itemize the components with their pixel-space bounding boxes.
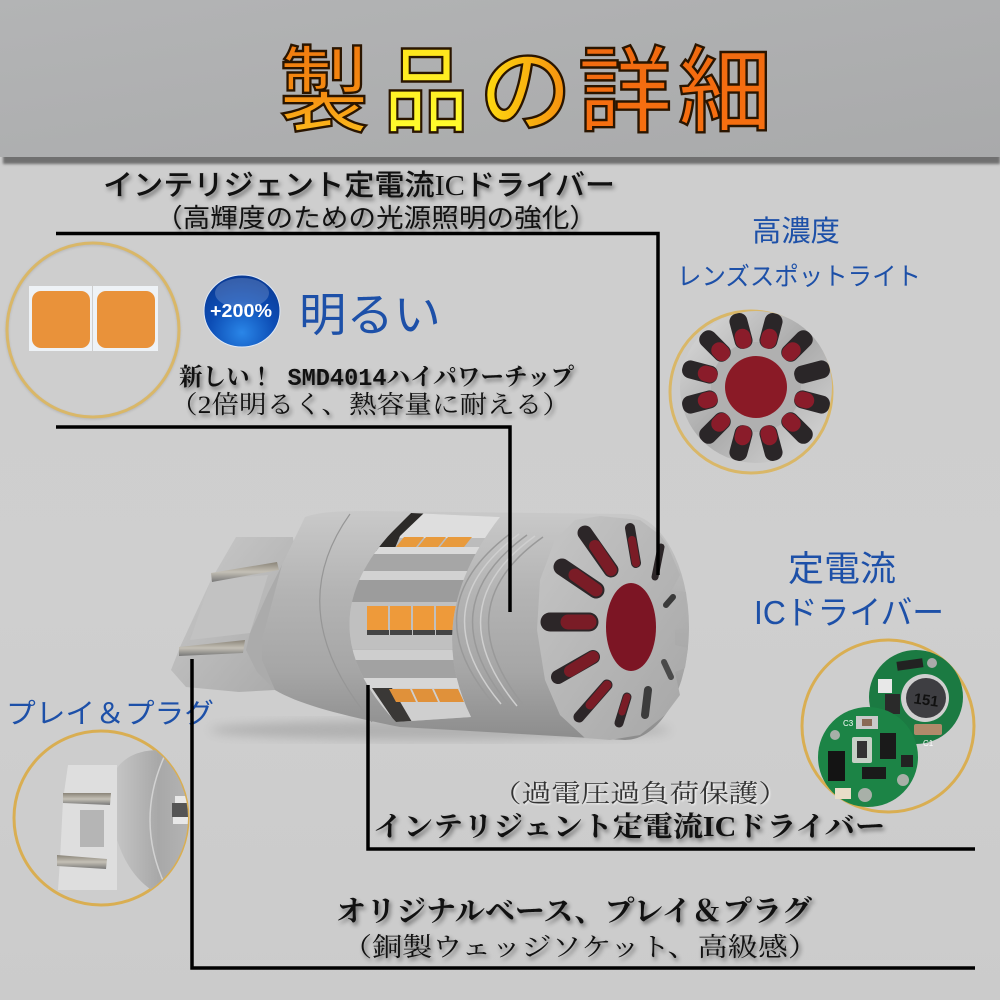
spoke slots bbox=[550, 528, 673, 723]
leader line: plug to base bbox=[192, 659, 975, 968]
connector pins bbox=[211, 562, 279, 582]
text: SMD4014 chip: （2倍明るく、熱容量に耐える） bbox=[170, 391, 570, 419]
panel: LED chip circle bbox=[7, 243, 179, 418]
connector base bbox=[171, 537, 300, 692]
text: overvoltage protection: （過電圧過負荷保護） bbox=[492, 780, 788, 808]
lens bbox=[606, 583, 656, 671]
collar edge bbox=[320, 514, 372, 722]
label: high density lens spotlight: レンズスポットライト bbox=[677, 263, 921, 291]
text: original base: オリジナルベース、プレイ＆プラグ bbox=[336, 895, 812, 928]
text: original base: （銅製ウェッジソケット、高級感） bbox=[342, 933, 818, 962]
label: bright: 明るい bbox=[299, 289, 441, 341]
title: 細 bbox=[678, 39, 772, 144]
heading: intelligent driver: インテリジェント定電流ICドライバー bbox=[103, 169, 615, 202]
label: high density lens spotlight: 高濃度 bbox=[752, 215, 840, 248]
title: 製 bbox=[279, 39, 369, 144]
icon: LED chips bbox=[29, 286, 158, 351]
bulb bbox=[171, 510, 689, 740]
heading: intelligent driver: （高輝度のための光源照明の強化） bbox=[155, 204, 597, 233]
text: SMD4014 chip bbox=[170, 364, 574, 419]
label: high density lens spotlight bbox=[677, 215, 921, 291]
finned face bbox=[537, 516, 688, 740]
lower circuit board: C3 bbox=[843, 719, 854, 728]
title: の bbox=[479, 39, 572, 144]
upper circuit board: 151 bbox=[913, 690, 940, 711]
leader line: driver to window bbox=[368, 685, 975, 849]
text: SMD4014 chip: 新しい！ SMD4014ハイパワーチップ bbox=[179, 364, 574, 393]
grooves bbox=[457, 533, 543, 707]
leader line: top driver to lens bbox=[56, 234, 658, 575]
panel: plug circle bbox=[14, 731, 200, 905]
main body bbox=[262, 511, 689, 740]
lower circuit board bbox=[818, 707, 918, 807]
title: 品 bbox=[383, 39, 469, 144]
title bbox=[279, 39, 772, 144]
label: plug and play: プレイ＆プラグ bbox=[6, 698, 214, 729]
title: 詳 bbox=[578, 39, 672, 144]
plug illustration bbox=[57, 750, 188, 890]
icon: +200% badge: +200% bbox=[210, 301, 272, 321]
top LEDs bbox=[396, 537, 472, 547]
upper circuit board bbox=[869, 650, 963, 748]
text: intelligent driver: インテリジェント定電流ICドライバー bbox=[373, 811, 885, 843]
header band bbox=[0, 0, 1000, 164]
bottom LEDs bbox=[389, 689, 464, 702]
icon: +200% badge bbox=[204, 275, 280, 347]
text: original base bbox=[336, 895, 818, 962]
leader line: chip to LEDs bbox=[56, 427, 510, 612]
middle LEDs bbox=[367, 606, 458, 635]
panel: PCB circle bbox=[802, 640, 974, 812]
LED window bbox=[350, 513, 500, 722]
upper circuit board: C1 bbox=[923, 739, 934, 748]
heading: intelligent driver bbox=[103, 169, 615, 233]
label: constant current IC driver: 定電流 bbox=[788, 550, 896, 589]
label: constant current IC driver bbox=[754, 550, 944, 631]
panel: lens spotlight circle bbox=[670, 311, 832, 473]
label: constant current IC driver: ICドライバー bbox=[754, 594, 944, 631]
lens face bbox=[680, 311, 832, 463]
